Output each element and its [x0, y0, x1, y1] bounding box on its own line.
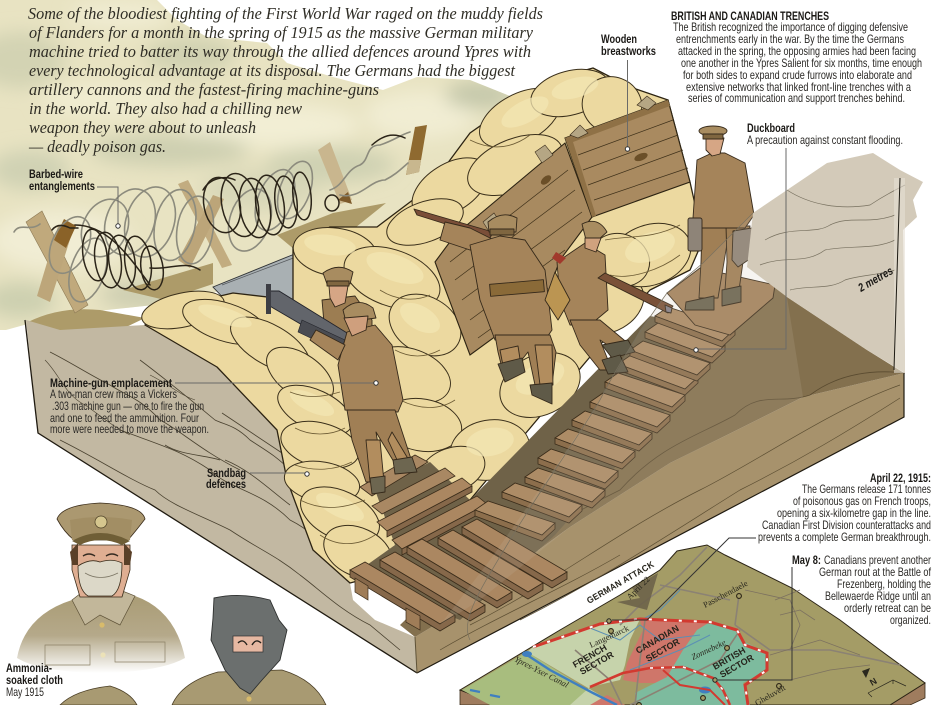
soldier: machine-gun loader — [310, 302, 417, 494]
dark wire coils — [52, 135, 405, 292]
grey steel plate — [213, 253, 300, 315]
intro text: artillery cannons and the fastest-firing machine-guns — [29, 80, 379, 99]
earth block: right face — [415, 373, 904, 673]
lower cross planks — [360, 455, 487, 555]
wooden breastworks — [435, 96, 690, 355]
height label: 2 metres: 2 metres — [855, 264, 896, 295]
callout: May 8: May 8: — [792, 554, 821, 567]
dark floor under the boards — [350, 316, 735, 620]
map labels: FRENCH — [571, 642, 608, 670]
text block: British and Canadian trenches: BRITISH AND CANADIAN TRENCHES — [671, 10, 829, 23]
canadian sector — [590, 620, 710, 705]
soldier: standing with jerry cans — [685, 126, 760, 310]
earth block: front-left face — [25, 320, 417, 673]
callout: sandbag defences: Sandbag — [207, 467, 246, 480]
left wooden panel — [435, 143, 592, 355]
label: ammonia-soaked cloth: May 1915 — [6, 686, 44, 699]
wooden cross posts — [26, 125, 427, 313]
individual sandbags — [138, 61, 700, 589]
sloped walkway slats — [475, 307, 735, 541]
callout: wooden breastworks: Wooden — [601, 33, 637, 46]
callout: May 8 — [713, 554, 932, 682]
peaked cap — [57, 503, 145, 540]
callout: machine-gun emplacement: .303 machine gun — one to fire the gun — [52, 400, 204, 413]
callout: machine-gun emplacement: Machine-gun emplacement — [50, 377, 172, 390]
intro text: — deadly poison gas. — [28, 137, 166, 156]
intro text: of Flanders for a month in the spring of 1915 as the massive German military — [29, 23, 534, 42]
map surface — [460, 545, 925, 705]
callout: barbed-wire label: entanglements — [29, 180, 95, 193]
callout: sandbag defences — [206, 467, 309, 491]
German attack arrow — [617, 573, 658, 610]
portrait: third soldier, cropped — [60, 686, 137, 705]
soldier: gunner behind — [322, 267, 372, 345]
lower left farmland — [462, 652, 617, 705]
intro text: weapon they were about to unleash — [29, 118, 256, 137]
canal and rivers — [470, 590, 710, 705]
label: ammonia-soaked cloth: soaked cloth — [6, 674, 63, 687]
sandbag defences mass — [138, 61, 703, 589]
map labels — [513, 559, 788, 705]
text block: British and Canadian trenches — [671, 10, 922, 105]
callout: sandbag defences: defences — [206, 478, 246, 491]
map labels: CANADIAN — [634, 623, 681, 656]
ground mounds behind the trench — [28, 203, 386, 330]
label: ammonia-soaked cloth — [6, 662, 63, 699]
callout: wooden breastworks — [601, 33, 656, 151]
translucent front trench wall — [440, 153, 923, 640]
british sector — [635, 622, 767, 705]
town markers — [609, 594, 781, 705]
map labels: SECTOR — [718, 652, 756, 680]
intro text: every technological advantage at its disposal. The Germans had the biggest — [29, 61, 515, 80]
compass and scale: N — [868, 676, 879, 688]
soldier: rifleman on the steps — [545, 221, 673, 374]
intro text: Some of the bloodiest fighting of the First World War raged on the muddy fields — [28, 4, 543, 23]
shoulders — [17, 590, 185, 673]
long floor planks — [350, 519, 567, 631]
map labels: GERMAN ATTACK — [585, 559, 656, 606]
callout: April 22, 1915 — [607, 472, 931, 623]
sandbag creases — [290, 135, 680, 544]
callout: duckboard: Duckboard — [747, 122, 795, 135]
intro text: in the world. They also had a chilling new — [29, 99, 302, 118]
map labels: Passchendaele — [701, 578, 749, 610]
callout: machine-gun emplacement: more were needed to move the weapon. — [50, 423, 209, 436]
cloth mask — [78, 560, 122, 596]
map labels: SECTOR — [644, 636, 682, 664]
callout: machine-gun emplacement: A two-man crew mans a Vickers — [50, 388, 177, 401]
french sector — [527, 619, 640, 705]
head — [72, 545, 130, 597]
hair sides — [70, 543, 132, 565]
machine gun — [266, 284, 352, 352]
front line: April — [533, 619, 767, 705]
portrait: soldier with hooded gas mask — [172, 595, 326, 705]
callout: wooden breastworks: breastworks — [601, 45, 656, 58]
grey wire coils — [14, 132, 410, 307]
roads — [575, 547, 900, 705]
map labels: Ypres-Yser Canal — [513, 654, 571, 690]
intro text: machine tried to batter its way through the allied defences around Ypres with — [29, 42, 531, 61]
callout: machine-gun emplacement — [50, 377, 378, 436]
compass and scale — [862, 668, 906, 697]
map: Ypres Salient terrain block — [460, 545, 925, 705]
ridge drainage lines — [745, 590, 870, 680]
map labels: BRITISH — [711, 645, 747, 672]
barbed-wire entanglements — [14, 125, 427, 313]
top duckboard platform — [667, 268, 775, 335]
eyes — [83, 554, 118, 556]
callout: machine-gun emplacement: and one to feed the ammunition. Four — [50, 412, 199, 425]
trench mud floor — [400, 285, 905, 637]
sandbag highlights — [196, 72, 679, 527]
callout: duckboard — [694, 122, 903, 352]
background smoke cloud — [0, 0, 540, 330]
duckboard walkway — [350, 268, 775, 631]
right wooden panel — [565, 96, 690, 217]
callout: barbed-wire label — [29, 168, 120, 228]
map labels: Langemarck — [588, 622, 631, 650]
label: ammonia-soaked cloth: Ammonia- — [6, 662, 52, 675]
intro text — [28, 4, 543, 156]
map labels: April 22 — [624, 574, 652, 601]
map labels: Zonnebeke — [690, 637, 727, 662]
block side faces — [460, 683, 925, 705]
callout: barbed-wire label: Barbed-wire — [29, 168, 83, 181]
soldier: rifleman facing the parapet — [414, 209, 556, 404]
portrait: soldier with ammonia-soaked cloth — [17, 503, 185, 673]
map labels: SECTOR — [578, 649, 616, 677]
